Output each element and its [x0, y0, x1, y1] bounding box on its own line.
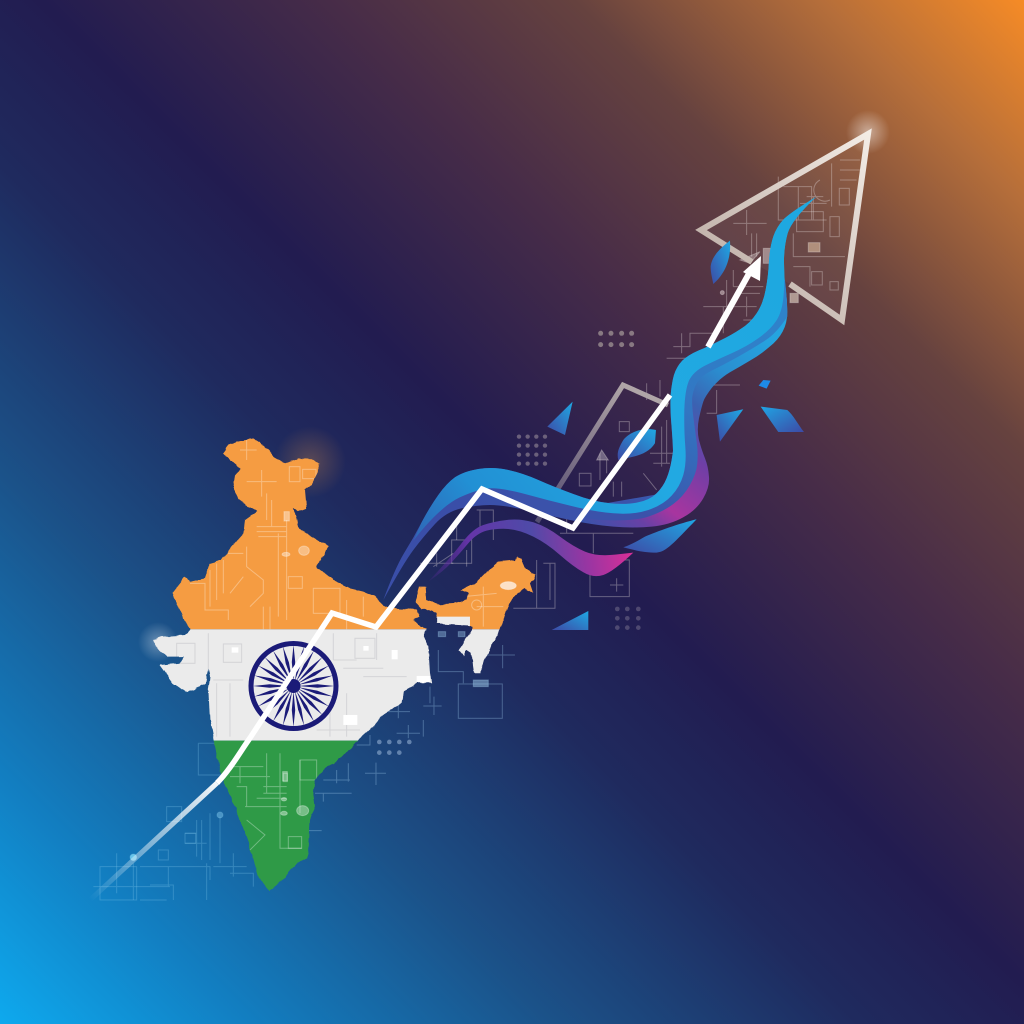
line lower section: [217, 395, 670, 783]
dots: middle grey grid: [517, 434, 547, 466]
arrowhead: [743, 256, 761, 281]
shard: small diamond: [759, 380, 771, 389]
glow: behind northern map: [274, 426, 346, 498]
shard: leaf lower right: [623, 519, 697, 553]
glow: arrow tip: [846, 110, 890, 154]
circuit pattern: background lower left: [93, 743, 253, 900]
large arrowhead outline: [701, 134, 868, 320]
purple ribbon: [428, 519, 633, 582]
shard: leaf top: [711, 241, 730, 284]
white chips: [232, 646, 430, 725]
circuit pattern: background east of map: [303, 632, 515, 831]
dots: lower dim grid: [615, 607, 641, 630]
shard: triangle left: [547, 402, 573, 435]
main ribbon bright top layer: [413, 197, 816, 541]
line upper section: [708, 270, 751, 347]
white growth line with arrowhead: [90, 256, 761, 900]
dots: upper grey grid: [598, 331, 634, 347]
dots: below map: [377, 740, 412, 755]
grey traces on white band: [177, 633, 407, 737]
glow: western map edge: [138, 622, 178, 662]
shard: triangle bottom: [552, 611, 588, 630]
Ashoka chakra wheel: [251, 644, 336, 728]
shard: wing far right: [761, 407, 804, 432]
circuit traces on map: [190, 437, 516, 850]
circuit pattern: behind chart line and arrow: [420, 160, 860, 608]
main ribbon middle layer: [513, 280, 787, 520]
main ribbon base layer: [383, 197, 816, 600]
map of India in flag colours: [153, 438, 536, 891]
flag stripes with rough edge: [153, 438, 536, 891]
Bengal white patch: [437, 617, 470, 626]
flowing ribbons: [383, 197, 816, 630]
grey zigzag line: [537, 385, 668, 522]
line tail fading: [90, 783, 217, 900]
shard: wedge right: [717, 409, 743, 442]
shard: rounded blob: [618, 429, 656, 460]
